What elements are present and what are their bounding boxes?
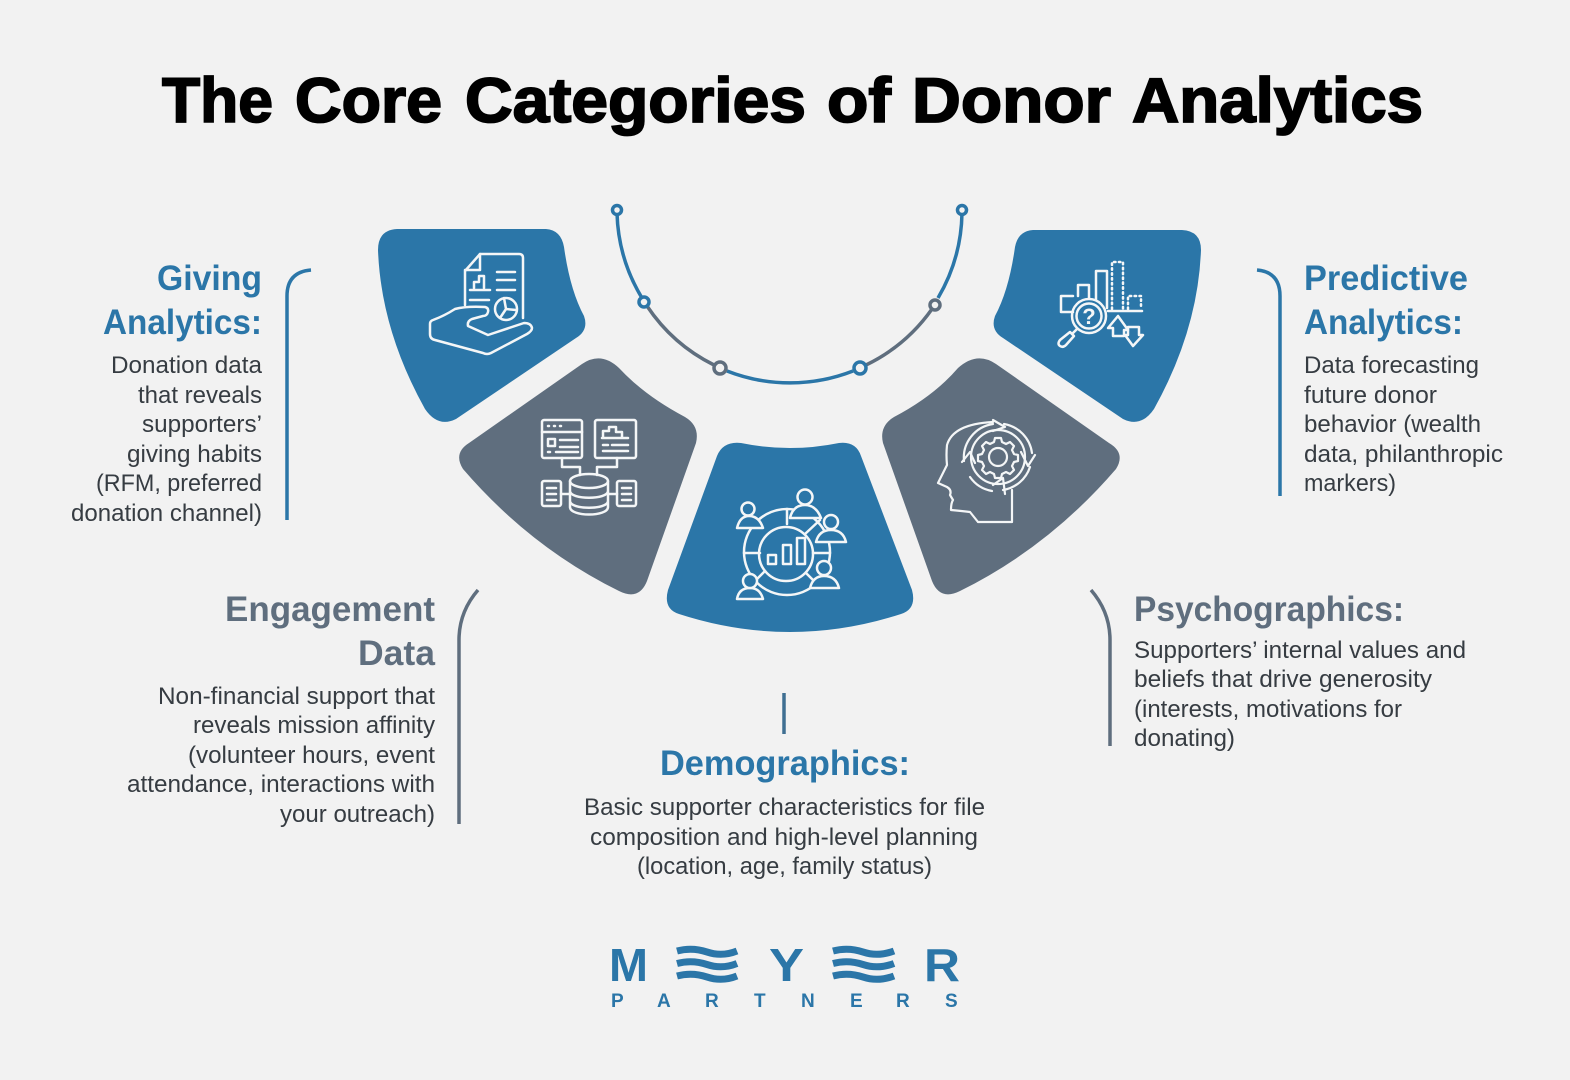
body: future donor (1304, 382, 1437, 409)
bracket: demographics (782, 693, 786, 734)
panel: psychographics shape (882, 358, 1120, 594)
title: of (827, 66, 892, 136)
bracket: psychographics (1091, 590, 1110, 746)
body: giving habits (127, 441, 262, 468)
arc connector (612, 206, 966, 383)
body (71, 352, 263, 527)
heading: Engagement (225, 590, 435, 629)
body: markers) (1304, 470, 1396, 497)
text: demographics (584, 744, 985, 880)
title: Donor (912, 66, 1111, 136)
panel: engagement data shape (459, 358, 697, 594)
body: beliefs that drive generosity (1134, 666, 1432, 693)
body: Supporters’ internal values and (1134, 637, 1466, 664)
body: reveals mission affinity (193, 712, 435, 739)
logo subtitle: PARTNERS (611, 991, 958, 1012)
title (162, 66, 1423, 136)
panel: demographics shape (667, 443, 913, 632)
body: attendance, interactions with (127, 771, 435, 798)
text: giving analytics (71, 259, 263, 527)
bracket: giving analytics (287, 270, 311, 520)
body: (location, age, family status) (637, 853, 932, 880)
heading: Demographics: (660, 744, 910, 783)
icon: predictive bars and magnifier (1058, 262, 1143, 347)
heading (1304, 259, 1468, 342)
heading: Psychographics: (1134, 590, 1404, 629)
icon: head with gear (938, 420, 1035, 522)
body: data, philanthropic (1304, 441, 1503, 468)
heading (103, 259, 262, 342)
body: donating) (1134, 725, 1235, 752)
body: donation channel) (71, 500, 262, 527)
text: predictive analytics (1304, 259, 1503, 497)
body: supporters’ (142, 411, 262, 438)
heading: Analytics: (103, 303, 262, 342)
bracket: engagement data (459, 590, 478, 824)
title: Analytics (1132, 66, 1423, 136)
body: behavior (wealth (1304, 411, 1481, 438)
icon: hand holding report (430, 254, 532, 354)
logo letters: Y (769, 939, 804, 991)
body: that reveals (138, 382, 262, 409)
heading: Data (358, 634, 436, 673)
heading: Giving (157, 259, 262, 298)
title: The (162, 66, 273, 136)
logo letters: M (609, 939, 648, 991)
icon: audience ring chart (737, 490, 846, 599)
panel: giving analytics shape (378, 229, 585, 422)
body: composition and high-level planning (590, 824, 978, 851)
logo letters (609, 939, 960, 991)
body (584, 794, 985, 880)
body (1134, 637, 1466, 752)
heading: Predictive (1304, 259, 1468, 298)
heading (225, 590, 436, 673)
title: Categories (465, 66, 806, 136)
body: (volunteer hours, event (188, 742, 435, 769)
logo letters: R (924, 939, 960, 991)
logo: Meyer Partners (609, 939, 960, 1012)
body: your outreach) (280, 801, 435, 828)
panel: predictive analytics shape (994, 230, 1201, 422)
body: (interests, motivations for (1134, 696, 1402, 723)
title: Core (295, 66, 442, 136)
logo waves (677, 949, 894, 979)
bracket: predictive analytics (1257, 270, 1280, 496)
text: psychographics (1134, 590, 1466, 752)
text: engagement data (127, 590, 436, 828)
icon glyph: question mark: ? (1082, 304, 1096, 329)
body: Basic supporter characteristics for file (584, 794, 985, 821)
body: Non-financial support that (158, 683, 435, 710)
heading: Analytics: (1304, 303, 1463, 342)
body: Data forecasting (1304, 352, 1479, 379)
body (1304, 352, 1503, 497)
body (127, 683, 435, 828)
body: (RFM, preferred (96, 470, 262, 497)
icon: database network (542, 420, 636, 514)
body: Donation data (111, 352, 263, 379)
